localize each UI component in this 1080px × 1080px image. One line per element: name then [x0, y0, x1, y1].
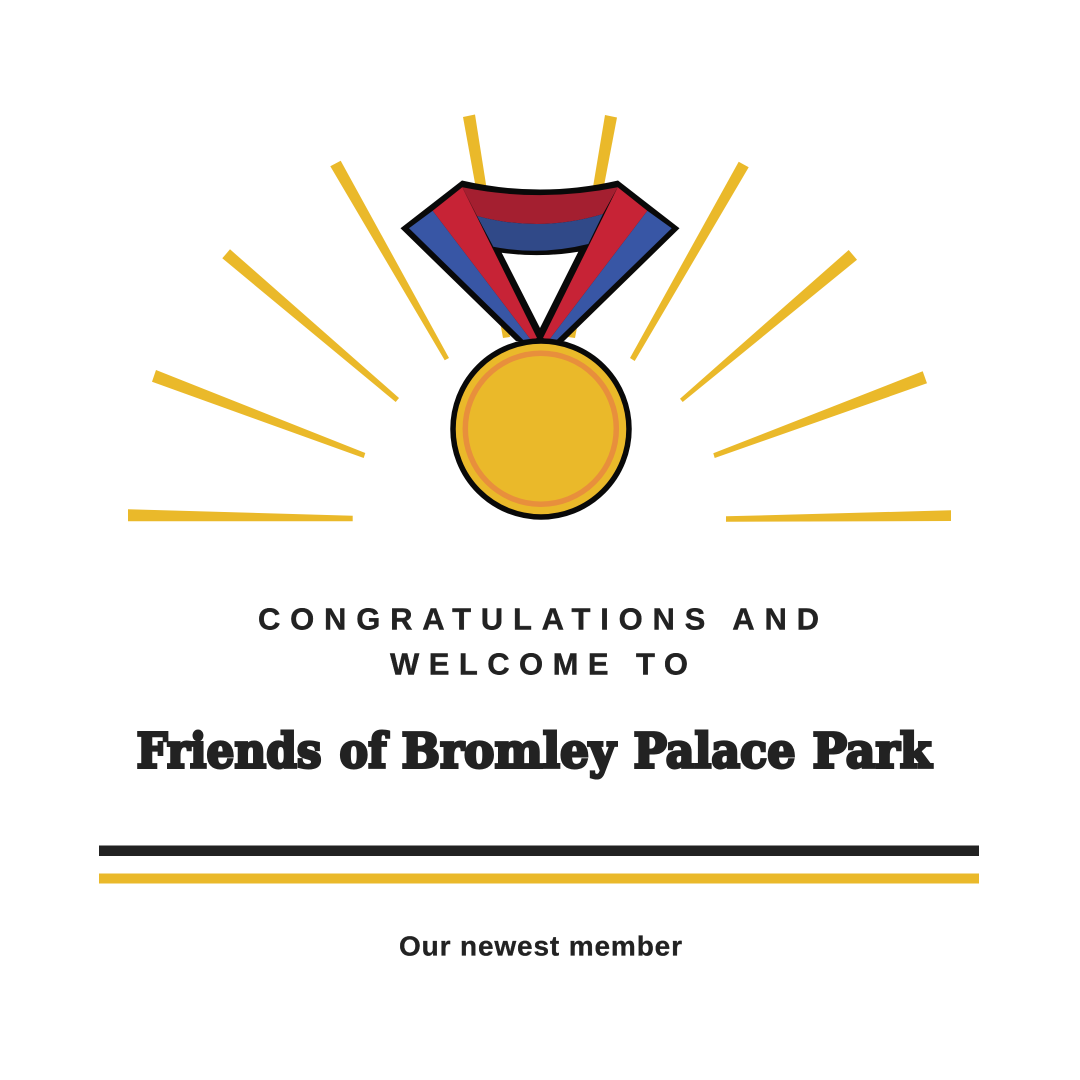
medal disc [453, 341, 629, 517]
title: Palace [634, 724, 796, 780]
sun rays [128, 114, 951, 522]
title: Bromley [402, 724, 618, 780]
title [136, 724, 933, 780]
medal ribbon [400, 180, 680, 341]
heading: congratulations: WELCOME TO [390, 646, 688, 682]
title: of [340, 724, 389, 780]
icon: medal [400, 180, 680, 517]
caption: Our newest member [399, 930, 682, 962]
medal inner ring [465, 353, 616, 504]
divider: gold [99, 874, 979, 884]
heading: congratulations: CONGRATULATIONS AND [258, 602, 819, 636]
title: Park [812, 724, 933, 780]
divider: black [99, 846, 979, 856]
heading: congratulations [258, 602, 819, 682]
title: Friends [136, 724, 322, 780]
